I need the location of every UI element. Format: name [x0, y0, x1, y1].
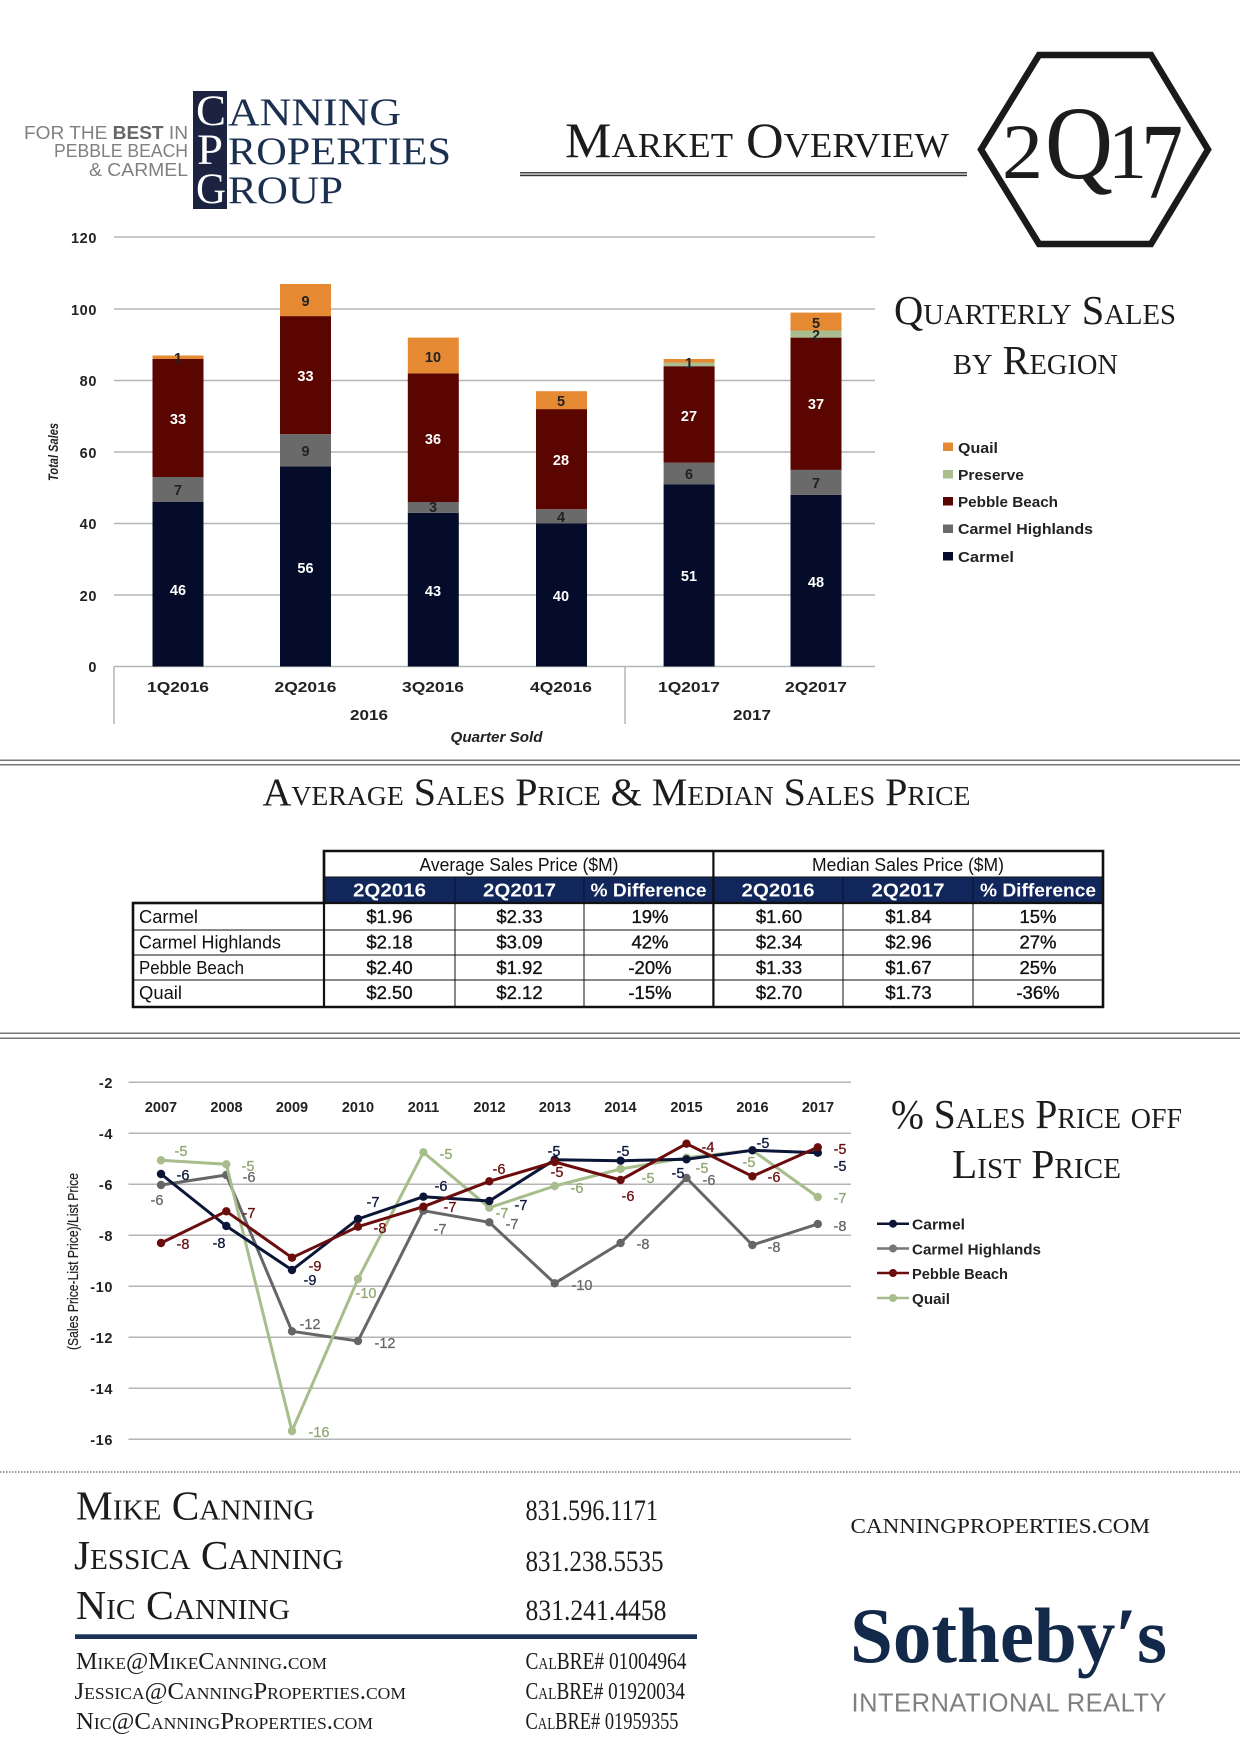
contact emails: Mike@MikeCanning.com: [76, 1649, 327, 1675]
website: CANNINGPROPERTIES.COM: [850, 1514, 1150, 1538]
series: Carmel: -5: [548, 1144, 560, 1160]
contact emails: Jessica@CanningProperties.com: [74, 1679, 406, 1705]
series: Carmel Highlands: -12: [375, 1336, 395, 1352]
x axis categories: 2017: [733, 707, 771, 724]
table row: Carmel: $1.96: [366, 906, 413, 927]
badge: 2Q17 hexagon: [981, 55, 1208, 244]
table row: Quail: $2.12: [496, 982, 543, 1003]
series: Carmel: -5: [834, 1159, 846, 1175]
bar: 4Q2016: 28: [553, 453, 569, 469]
series: Quail: -5: [696, 1161, 708, 1177]
series: Carmel Highlands: -6: [703, 1173, 715, 1189]
table row: Carmel: 19%: [631, 906, 669, 927]
table row: Pebble Beach: -20%: [628, 957, 672, 978]
legend: quarterly sales: Preserve: [958, 468, 1024, 484]
contact names: Jessica Canning: [74, 1532, 344, 1578]
table row: Carmel: $2.33: [496, 906, 543, 927]
series: Carmel: -6: [177, 1168, 189, 1184]
x axis categories: 4Q2016: [530, 679, 592, 696]
grid lines: [114, 237, 875, 724]
bar: 2Q2017: 5: [812, 316, 820, 332]
legend: line chart: Carmel Highlands: [912, 1242, 1041, 1258]
year labels: 2013: [539, 1100, 571, 1116]
logo: Sotheby's International Realty: INTERNATIONAL REALTY: [852, 1690, 1166, 1718]
series: Carmel: -8: [213, 1236, 225, 1252]
heading: % Sales Price off List Price: List Price: [952, 1141, 1121, 1187]
logo wordmark: ANNING: [228, 91, 401, 134]
series: Pebble Beach: [157, 1140, 846, 1275]
bar: 2Q2017: [790, 313, 842, 666]
logo: Canning Properties Group: [24, 88, 451, 213]
y axis labels: -4: [99, 1127, 113, 1143]
bar: 4Q2016: 40: [553, 589, 569, 605]
year labels: 2010: [342, 1100, 374, 1116]
table row: Carmel Highlands: $2.18: [366, 932, 413, 952]
year labels: 2015: [670, 1100, 703, 1116]
heading: % Sales Price off List Price: [891, 1091, 1182, 1187]
contact names: Nic Canning: [76, 1582, 290, 1628]
bar: 2Q2017: 37: [808, 397, 824, 413]
table row: Carmel: 15%: [1019, 906, 1057, 927]
bar: 2Q2016: 33: [297, 369, 314, 385]
badge: 2Q17 hexagon: Q: [1045, 86, 1113, 201]
contact phone numbers: 831.238.5535: [526, 1545, 664, 1578]
series: Carmel: -5: [617, 1144, 629, 1160]
x axis categories: 2Q2017: [785, 679, 847, 696]
contact names: [74, 1482, 344, 1628]
table row: Carmel: $1.84: [885, 906, 932, 927]
series: Carmel: -6: [435, 1179, 447, 1195]
table column headers: % Difference: [590, 880, 706, 900]
table: average and median sales price: Median Sales Price ($M): [812, 854, 1004, 875]
table header band: [324, 877, 1103, 903]
contact names: Mike Canning: [76, 1482, 315, 1528]
logo wordmark: ROPERTIES: [228, 130, 451, 173]
table column headers: % Difference: [980, 880, 1096, 900]
tagline: PEBBLE BEACH: [54, 141, 188, 161]
series: Pebble Beach: -7: [243, 1206, 255, 1222]
table row: Quail: $1.73: [885, 982, 932, 1003]
series: Pebble Beach: -9: [309, 1259, 321, 1275]
series: Quail: -6: [571, 1181, 583, 1197]
legend: line chart: Pebble Beach: [912, 1267, 1008, 1283]
legend: line chart: [877, 1218, 1041, 1308]
series: Quail: -5: [743, 1155, 755, 1171]
bar: 1Q2016: 46: [170, 583, 186, 599]
table column headers: 2Q2016: [353, 880, 426, 900]
bar: 4Q2016: 5: [557, 394, 565, 410]
table row: Carmel Highlands: 42%: [631, 932, 669, 952]
series: Pebble Beach: -5: [834, 1142, 846, 1158]
bar: 1Q2017: 1: [685, 356, 693, 372]
y axis labels: 60: [80, 446, 97, 462]
bar: 3Q2016: 36: [425, 432, 441, 448]
bar: 1Q2016: 33: [170, 412, 186, 428]
year labels: 2009: [276, 1100, 308, 1116]
heading: Quarterly Sales by Region: [894, 287, 1176, 383]
bar: 2Q2017: 2: [812, 328, 820, 344]
year labels: [145, 1100, 834, 1116]
bar: 1Q2016: 7: [174, 483, 182, 499]
y axis labels: 20: [80, 589, 97, 605]
series: Carmel: -7: [367, 1195, 379, 1211]
series: Carmel Highlands: -6: [243, 1170, 255, 1186]
y axis labels: -12: [90, 1331, 113, 1347]
legend: line chart: Carmel: [912, 1218, 965, 1234]
series: Quail: -10: [356, 1286, 376, 1302]
y axis labels: [90, 1076, 113, 1449]
license numbers: CalBRE# 01920034: [526, 1679, 685, 1705]
x axis categories: 1Q2017: [658, 679, 720, 696]
table row: Carmel Highlands: [139, 932, 1057, 952]
y axis labels: 100: [71, 303, 97, 319]
contact emails: Nic@CanningProperties.com: [76, 1709, 373, 1735]
series: Carmel Highlands: -12: [300, 1317, 320, 1333]
legend: line chart: Quail: [912, 1292, 950, 1308]
bar: 3Q2016: 3: [429, 500, 437, 516]
bar: 3Q2016: [408, 338, 459, 666]
y axis labels: 40: [80, 517, 97, 533]
y axis title: Total Sales: [45, 423, 61, 481]
series: Quail: -7: [834, 1191, 846, 1207]
footer rule: [75, 1634, 697, 1639]
legend: quarterly sales: Carmel: [958, 550, 1014, 566]
stacked bar chart: quarterly sales: [45, 231, 875, 746]
series: Pebble Beach: -8: [374, 1221, 386, 1237]
badge: 2Q17 hexagon: 7: [1141, 103, 1183, 222]
table row: Pebble Beach: $1.67: [885, 957, 932, 978]
license numbers: [526, 1649, 686, 1735]
table row: Carmel Highlands: Carmel Highlands: [139, 932, 281, 952]
tagline: & CARMEL: [89, 160, 188, 180]
y axis labels: [71, 231, 97, 676]
series: Pebble Beach: -8: [177, 1237, 189, 1253]
series: Pebble Beach: -7: [444, 1200, 456, 1216]
year labels: 2016: [736, 1100, 769, 1116]
series: Carmel: -7: [515, 1198, 527, 1214]
year labels: 2014: [604, 1100, 637, 1116]
bar: 2Q2016: [280, 284, 331, 666]
series: Pebble Beach: -4: [702, 1140, 714, 1156]
series: Carmel: -5: [757, 1136, 769, 1152]
series: Quail: -16: [309, 1425, 329, 1441]
series: Carmel Highlands: -8: [637, 1237, 649, 1253]
table row: Quail: $2.70: [756, 982, 802, 1003]
table row: Pebble Beach: Pebble Beach: [139, 957, 244, 978]
series: Quail: [157, 1144, 846, 1441]
bar: 1Q2017: 51: [681, 569, 697, 585]
bar: 2Q2017: 7: [812, 476, 820, 492]
logo: Sotheby's International Realty: Sotheby′s: [850, 1592, 1167, 1679]
series: Carmel: -5: [672, 1166, 684, 1182]
legend: quarterly sales: Carmel Highlands: [958, 522, 1093, 538]
bar: 4Q2016: [536, 391, 587, 666]
table column headers: [353, 880, 1096, 900]
series: Pebble Beach: -5: [551, 1165, 563, 1181]
x axis categories: 1Q2016: [147, 679, 209, 696]
table row: Pebble Beach: $2.40: [366, 957, 413, 978]
bar: 1Q2016: [152, 351, 204, 666]
series: Carmel Highlands: -6: [151, 1193, 163, 1209]
year labels: 2011: [408, 1100, 439, 1116]
series: Carmel Highlands: -10: [572, 1278, 592, 1294]
x axis categories: 3Q2016: [402, 679, 464, 696]
series: Carmel: -9: [304, 1273, 316, 1289]
year labels: 2007: [145, 1100, 177, 1116]
table row: Carmel Highlands: $3.09: [496, 932, 543, 952]
legend: quarterly sales: Pebble Beach: [958, 495, 1058, 511]
contact phone numbers: [526, 1494, 666, 1627]
y axis title: (Sales Price-List Price)/List Price: [66, 1173, 82, 1350]
table column headers: 2Q2017: [483, 880, 556, 900]
y axis labels: -8: [99, 1229, 113, 1245]
series: Pebble Beach: -6: [493, 1162, 505, 1178]
table row: Quail: $2.50: [366, 982, 413, 1003]
logo wordmark: ROUP: [228, 169, 343, 212]
logo wordmark: P: [197, 127, 223, 174]
bar: 4Q2016: 4: [557, 510, 565, 526]
x axis categories: 2Q2016: [274, 679, 336, 696]
year labels: 2012: [473, 1100, 506, 1116]
heading: Quarterly Sales by Region: by Region: [953, 337, 1118, 383]
logo: Sotheby's International Realty: [850, 1592, 1167, 1718]
table row: Quail: -15%: [628, 982, 672, 1003]
x axis categories: [147, 679, 847, 724]
bar: 1Q2016: 1: [174, 351, 182, 367]
bar: 2Q2016: 56: [297, 561, 314, 577]
series: Pebble Beach: -6: [622, 1189, 634, 1205]
table row: Carmel: [139, 906, 1057, 927]
logo initials block: [193, 91, 227, 209]
y axis labels: -16: [90, 1433, 113, 1449]
tagline: FOR THE BEST IN: [24, 123, 188, 143]
table row: Quail: Quail: [139, 982, 182, 1003]
table row: Quail: [139, 982, 1060, 1003]
table row: Pebble Beach: 25%: [1019, 957, 1057, 978]
bar: 1Q2017: 27: [681, 409, 697, 425]
table rules: [133, 851, 1103, 1007]
heading: Quarterly Sales by Region: Quarterly Sales: [894, 287, 1176, 333]
series: Quail: -5: [642, 1171, 654, 1187]
table row: Pebble Beach: $1.33: [756, 957, 802, 978]
license numbers: CalBRE# 01959355: [526, 1709, 678, 1735]
series: Quail: -7: [496, 1206, 508, 1222]
table row: Quail: -36%: [1016, 982, 1060, 1003]
series: Carmel Highlands: -7: [506, 1217, 518, 1233]
table row: Carmel Highlands: 27%: [1019, 932, 1057, 952]
license numbers: CalBRE# 01004964: [526, 1649, 686, 1675]
series: Carmel Highlands: -8: [834, 1219, 846, 1235]
badge: 2Q17 hexagon: 2: [1002, 108, 1043, 195]
table row: Carmel Highlands: $2.34: [756, 932, 802, 952]
contact phone numbers: 831.596.1171: [526, 1494, 658, 1527]
table row: Carmel: Carmel: [139, 906, 198, 927]
y axis labels: -2: [99, 1076, 113, 1092]
bar: 3Q2016: 10: [425, 350, 441, 366]
tagline: [24, 123, 188, 180]
table row: Pebble Beach: [139, 957, 1057, 978]
table column headers: 2Q2016: [742, 880, 814, 900]
legend: quarterly sales: [943, 441, 1093, 566]
title: Market Overview: Market Overview: [565, 112, 949, 168]
bar: 3Q2016: 43: [425, 584, 441, 600]
bar: 2Q2016: 9: [301, 444, 310, 460]
x axis categories: 2016: [350, 707, 388, 724]
table group headers: Average Sales Price ($M): [420, 854, 618, 875]
table row: Carmel: $1.60: [756, 906, 802, 927]
y axis labels: -6: [99, 1178, 113, 1194]
logo wordmark: C: [196, 88, 226, 135]
table: average and median sales price: [133, 851, 1103, 1007]
y axis labels: -10: [90, 1280, 113, 1296]
year labels: 2008: [210, 1100, 243, 1116]
x axis title: Quarter Sold: [450, 730, 544, 746]
y axis labels: 0: [88, 660, 97, 676]
y axis labels: 120: [71, 231, 97, 247]
y axis labels: 80: [80, 374, 97, 390]
series: Quail: -5: [440, 1147, 452, 1163]
series: Pebble Beach: -6: [768, 1170, 780, 1186]
table column headers: 2Q2017: [872, 880, 944, 900]
y axis labels: -14: [90, 1382, 113, 1398]
series: Carmel Highlands: -7: [434, 1222, 446, 1238]
grid lines: [128, 1082, 851, 1439]
legend: quarterly sales: Quail: [958, 441, 998, 457]
table row: Pebble Beach: $1.92: [496, 957, 543, 978]
logo wordmark: G: [196, 166, 226, 213]
line chart: % sales price off list price: [66, 1076, 851, 1449]
table row: Carmel Highlands: $2.96: [885, 932, 932, 952]
badge: 2Q17 hexagon: 1: [1108, 108, 1147, 195]
year labels: 2017: [802, 1100, 834, 1116]
contact emails: [74, 1649, 406, 1735]
logo wordmark: [196, 88, 451, 213]
bar: 1Q2017: 6: [685, 467, 693, 483]
series: Carmel Highlands: -8: [768, 1240, 780, 1256]
bar: 1Q2017: [664, 356, 715, 666]
bar: 2Q2016: 9: [301, 294, 310, 310]
series: Quail: -5: [242, 1159, 254, 1175]
series: Carmel Highlands: [151, 1170, 846, 1352]
heading: % Sales Price off List Price: % Sales Price off: [891, 1091, 1182, 1137]
series: Quail: -5: [175, 1144, 187, 1160]
series: Carmel: [157, 1136, 846, 1289]
bar: 2Q2017: 48: [808, 575, 824, 591]
heading: Average Sales Price & Median Sales Price: Average Sales Price & Median Sales Price: [262, 771, 970, 814]
contact phone numbers: 831.241.4458: [526, 1594, 666, 1627]
